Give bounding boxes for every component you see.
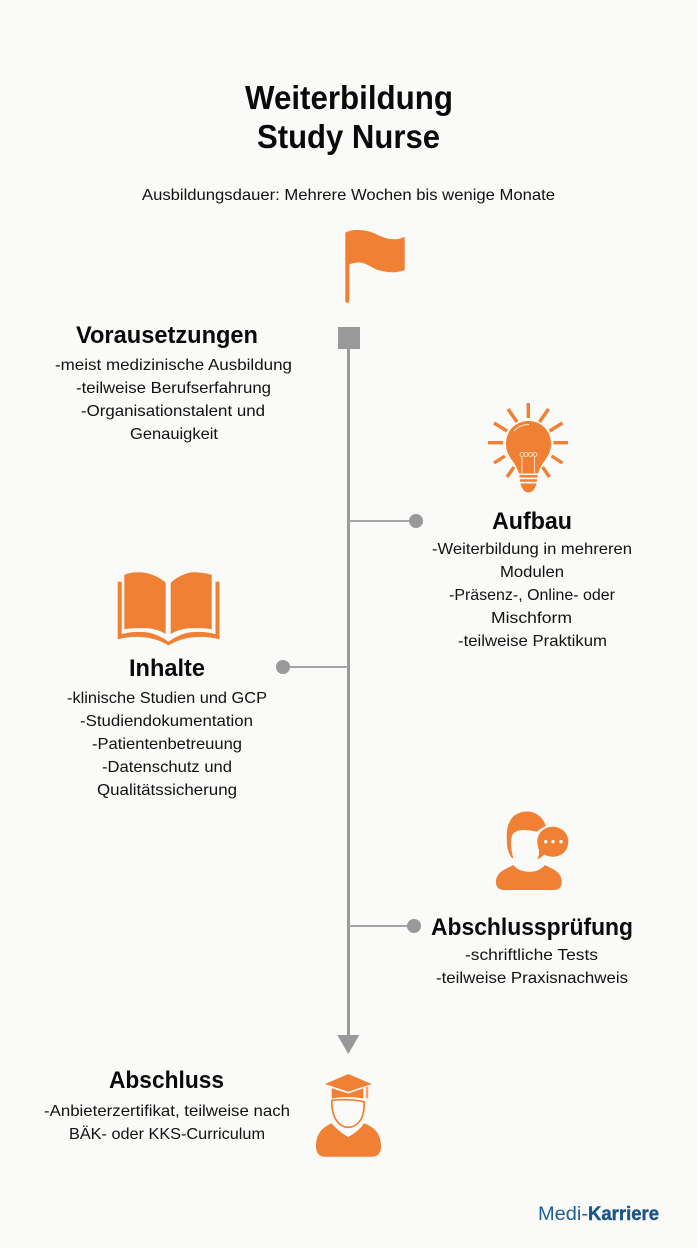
connector: Aufbau xyxy=(349,514,423,528)
panel: Inhalte: Inhalte xyxy=(129,655,205,682)
panel: Abschlussprüfung: -schriftliche Tests xyxy=(465,947,598,964)
panel: Inhalte: -Datenschutz und xyxy=(102,759,232,776)
panel: Vorausetzungen: Genauigkeit xyxy=(130,426,219,443)
panel: Aufbau: Mischform xyxy=(491,610,572,627)
panel: Inhalte: -klinische Studien und GCP xyxy=(67,690,267,707)
icon: flag xyxy=(345,230,405,303)
icon: graduate xyxy=(316,1074,381,1157)
panel: Abschluss: BÄK- oder KKS-Curriculum xyxy=(69,1125,265,1143)
panel: Vorausetzungen: -meist medizinische Ausbildung xyxy=(55,357,292,374)
panel: Inhalte: -Patientenbetreuung xyxy=(92,736,242,753)
subtitle: training duration: Ausbildungsdauer: Mehrere Wochen bis wenige Monate xyxy=(142,187,555,204)
logo: Medi-Karriere: Karriere xyxy=(588,1204,659,1225)
panel: Abschlussprüfung xyxy=(431,914,633,987)
panel: Inhalte: -Studiendokumentation xyxy=(80,713,253,730)
title: Study Nurse xyxy=(257,118,440,155)
panel: Inhalte xyxy=(67,655,267,799)
logo: Medi-Karriere xyxy=(538,1204,659,1225)
panel: Vorausetzungen xyxy=(55,322,292,443)
panel: Inhalte: Qualitätssicherung xyxy=(97,782,237,799)
panel: Vorausetzungen: -teilweise Berufserfahrung xyxy=(76,380,271,397)
icon: open book xyxy=(118,572,220,646)
icon: person with speech bubble xyxy=(496,812,568,890)
panel: Vorausetzungen: -Organisationstalent und xyxy=(81,403,265,420)
panel: Aufbau: -teilweise Praktikum xyxy=(458,633,607,650)
panel: Abschlussprüfung: -teilweise Praxisnachweis xyxy=(436,970,628,987)
panel: Aufbau: -Präsenz-, Online- oder xyxy=(449,587,616,604)
panel: Abschluss xyxy=(44,1067,290,1143)
connector: Abschlussprüfung xyxy=(349,919,421,933)
panel: Abschluss: Abschluss xyxy=(109,1067,224,1094)
panel: Aufbau: Modulen xyxy=(500,564,564,581)
title: Weiterbildung xyxy=(245,79,453,116)
logo: Medi-Karriere: Medi- xyxy=(538,1204,588,1225)
timeline xyxy=(337,327,360,1054)
panel: Aufbau xyxy=(432,508,632,650)
icon: light bulb xyxy=(488,403,568,492)
panel: Abschluss: -Anbieterzertifikat, teilweise nach xyxy=(44,1103,290,1120)
title xyxy=(245,79,453,155)
panel: Aufbau: Aufbau xyxy=(492,508,572,535)
connector: Inhalte xyxy=(276,660,348,674)
panel: Vorausetzungen: Vorausetzungen xyxy=(76,322,258,349)
panel: Abschlussprüfung: Abschlussprüfung xyxy=(431,914,633,941)
panel: Aufbau: -Weiterbildung in mehreren xyxy=(432,541,632,558)
